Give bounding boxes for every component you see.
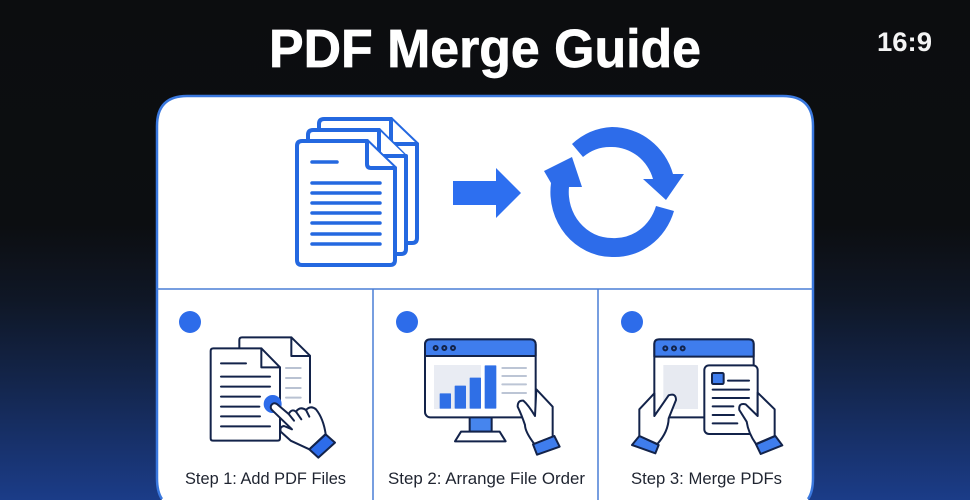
step 3 panel (621, 311, 782, 488)
step 1 label: Step 1: Add PDF Files (185, 469, 346, 488)
arrow: to merge (453, 168, 521, 218)
step 2 label: Step 2: Arrange File Order (388, 469, 585, 488)
step 3 dot (621, 311, 643, 333)
step 1 panel (179, 311, 346, 488)
step 2 icon: monitor with chart and hand (425, 339, 560, 455)
step 2 panel (388, 311, 585, 488)
panel: main card (157, 96, 813, 500)
icon: circular refresh arrows (544, 127, 684, 257)
step 1 icon: documents and pointing hand (211, 337, 335, 458)
icon: stacked documents (297, 119, 417, 265)
step 2 dot (396, 311, 418, 333)
title: PDF Merge Guide (269, 19, 701, 79)
step 1 dot (179, 311, 201, 333)
aspect ratio label: 16:9 (877, 27, 932, 57)
step 3 label: Step 3: Merge PDFs (631, 469, 782, 488)
step 3 icon: window with document and hands (632, 339, 782, 454)
